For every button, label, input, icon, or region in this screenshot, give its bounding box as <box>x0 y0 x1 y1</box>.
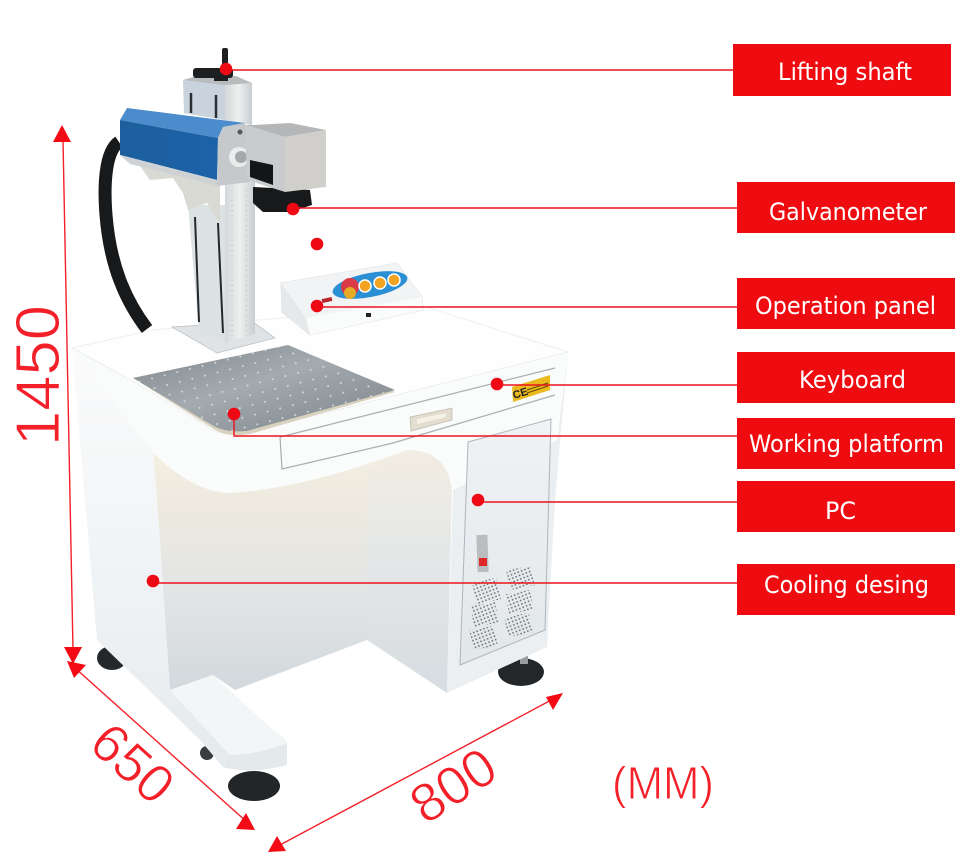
callout: working platform: Working platform <box>749 430 944 458</box>
warning label <box>511 375 550 402</box>
laser head <box>120 108 250 186</box>
unit label: (MM) <box>612 757 714 809</box>
lifting handle <box>193 48 233 81</box>
stray marker dot <box>311 238 323 250</box>
dimension: width 800: 800 <box>399 736 508 836</box>
cabinet body <box>72 305 568 771</box>
dimension: depth 650 <box>67 661 255 830</box>
lifting column <box>140 76 275 353</box>
callout: PC: PC <box>825 497 856 525</box>
callout: lifting shaft <box>220 44 951 96</box>
callout: keyboard: Keyboard <box>799 366 906 394</box>
dimension: depth 650: 650 <box>79 711 186 816</box>
galvanometer <box>245 123 326 212</box>
callout: working platform <box>228 408 955 469</box>
working platform <box>133 345 395 435</box>
callout: keyboard <box>491 352 955 403</box>
drawer and seams <box>280 368 555 469</box>
feet <box>97 646 544 801</box>
operation panel <box>281 263 423 335</box>
laser machine illustration <box>72 48 568 801</box>
drawer handle <box>410 408 452 431</box>
dimension: height 1450 <box>4 125 82 664</box>
fibre cable <box>105 142 147 329</box>
callout: PC <box>472 481 955 532</box>
dimension: height 1450: 1450 <box>4 305 73 446</box>
callout: galvanometer: Galvanometer <box>769 198 927 226</box>
callout: cooling design <box>147 564 955 615</box>
callout: lifting shaft: Lifting shaft <box>778 58 912 86</box>
computer door with vents <box>460 419 551 665</box>
callout: operation panel <box>311 278 955 329</box>
dimension: width 800 <box>268 693 563 852</box>
callout: operation panel: Operation panel <box>755 292 936 320</box>
warning label: CE <box>511 386 529 402</box>
callout: cooling design: Cooling desing <box>764 571 929 599</box>
callout: galvanometer <box>287 182 955 233</box>
